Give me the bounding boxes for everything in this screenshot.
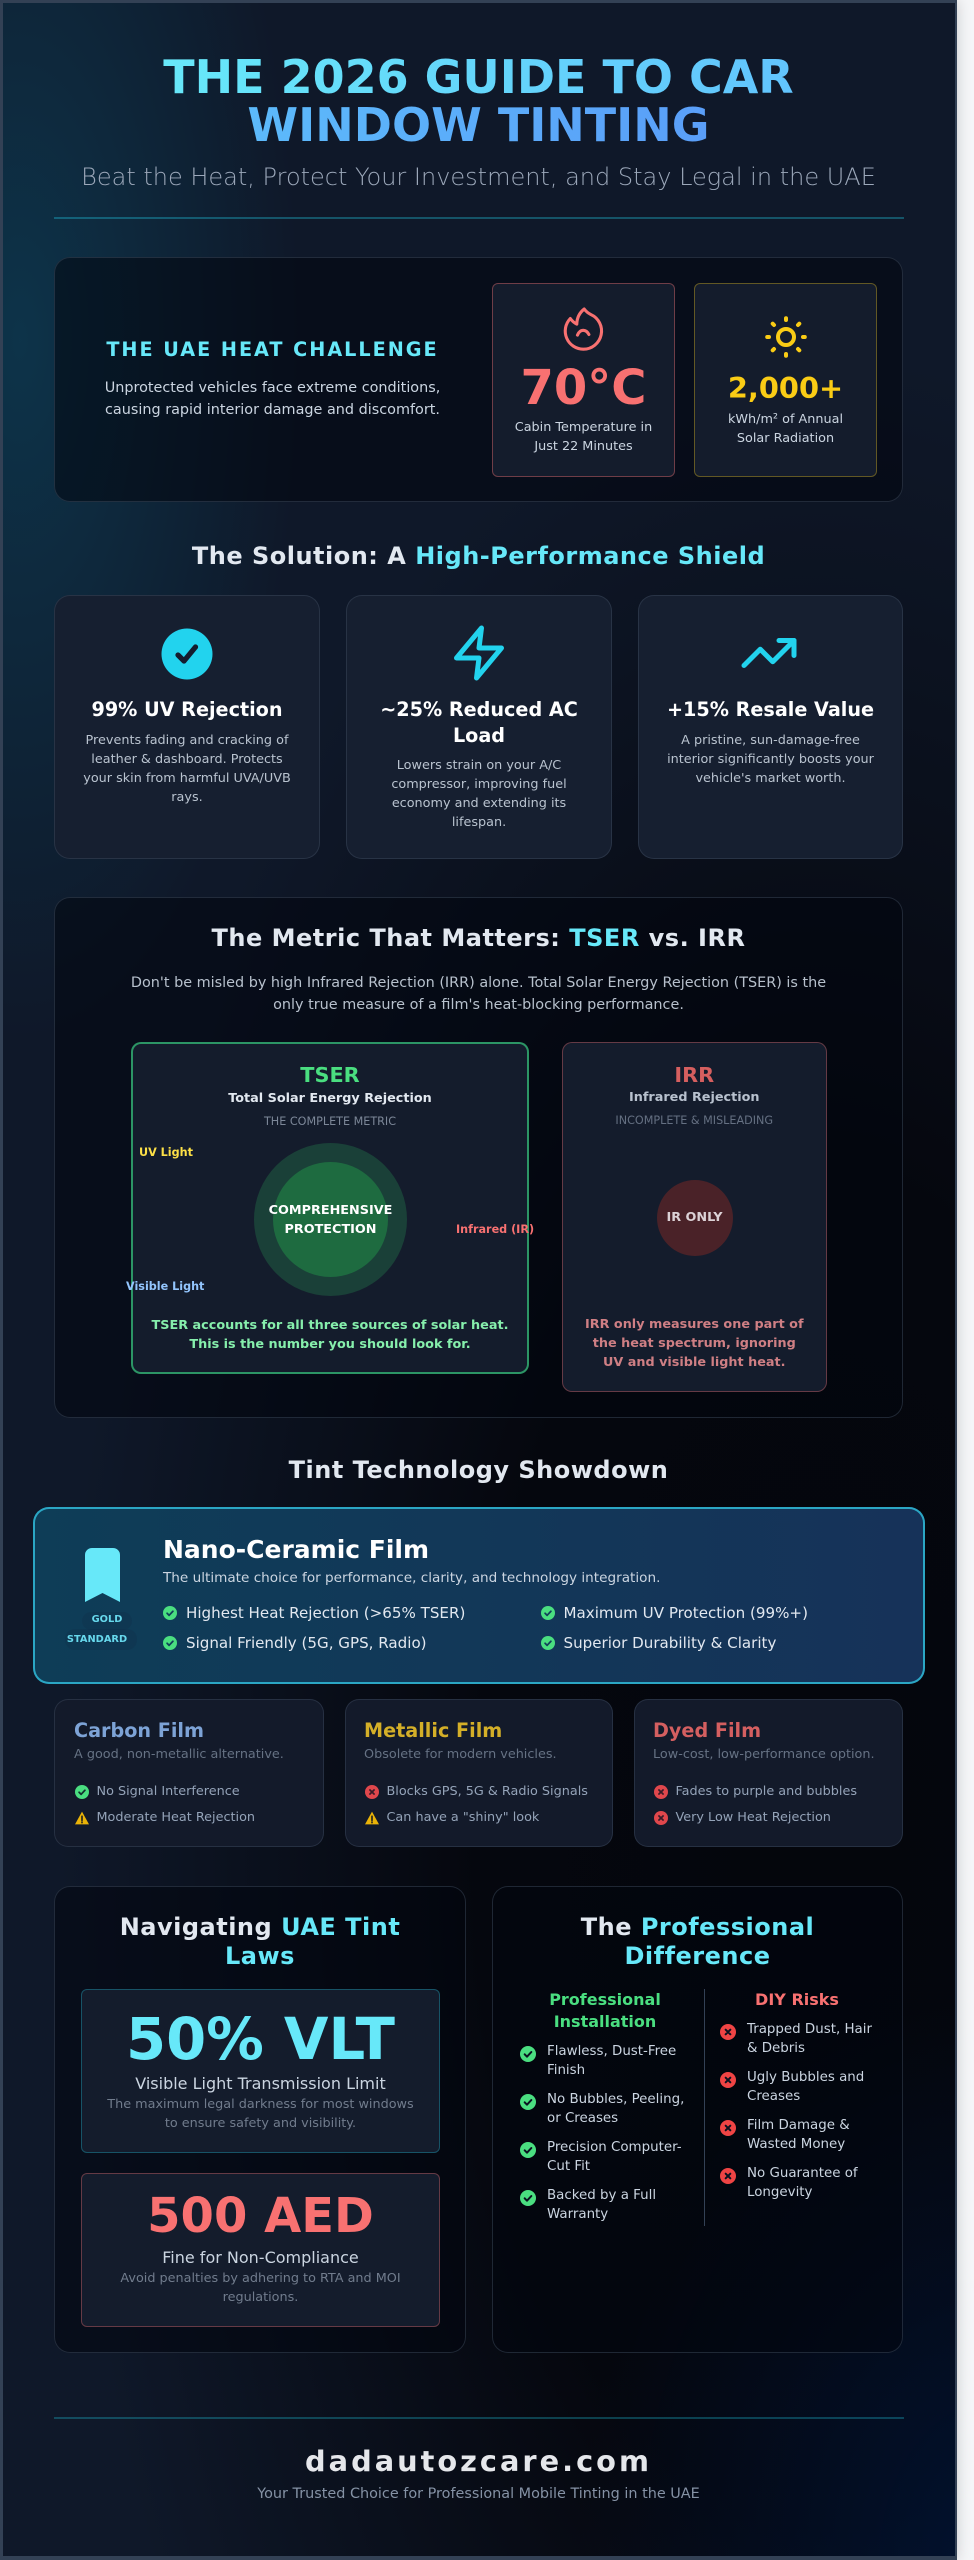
item: shiny look: Can have a "shiny" look — [386, 1810, 539, 1825]
item: no bubbles: or Creases — [547, 2111, 618, 2126]
card note — [152, 1318, 508, 1352]
card subtitle: Total Solar Energy Rejection — [228, 1091, 432, 1106]
card subtitle: A good, non-metallic alternative. — [74, 1747, 284, 1762]
feature: highest heat rejection: Highest Heat Rejection (>65% TSER) — [186, 1604, 465, 1622]
label: infrared: Infrared (IR) — [456, 1223, 534, 1236]
circle label — [269, 1202, 392, 1236]
label: visible light: Visible Light — [126, 1280, 204, 1293]
heading: heat challenge: THE UAE HEAT CHALLENGE — [106, 338, 439, 361]
item: no bubbles: No Bubbles, Peeling, — [547, 2092, 684, 2107]
panel: UAE tint laws — [54, 1886, 466, 2353]
stat value: 50% VLT: 50% VLT — [126, 2006, 395, 2073]
item: trapped dust: & Debris — [747, 2041, 805, 2056]
stat description — [120, 2270, 401, 2304]
card title: Load — [453, 724, 505, 747]
card subtitle: The ultimate choice for performance, clarity, and technology integration. — [163, 1570, 660, 1586]
column: professional installation — [520, 1990, 684, 2222]
text: metric intro: only true measure of a film's heat-blocking performance. — [273, 997, 684, 1013]
stat description: The maximum legal darkness for most windows — [107, 2096, 414, 2112]
heading: the solution: The Solution: A High-Performance Shield — [192, 542, 765, 570]
title — [163, 50, 794, 152]
card subtitle: Obsolete for modern vehicles. — [364, 1747, 557, 1762]
feature: signal friendly: Signal Friendly (5G, GPS, Radio) — [186, 1634, 427, 1652]
card title: Dyed Film — [653, 1719, 761, 1742]
item: ugly bubbles — [716, 2068, 891, 2108]
outer protection ring — [254, 1143, 407, 1296]
heading: tint technology showdown: Tint Technology Showdown — [289, 1456, 668, 1484]
item: no signal interference: No Signal Interference — [96, 1784, 240, 1799]
item: flawless finish: Flawless, Dust-Free — [547, 2044, 676, 2059]
heading: navigating UAE tint laws: Laws — [225, 1942, 295, 1970]
card text — [83, 732, 291, 805]
item: precision cut: Cut Fit — [547, 2159, 590, 2174]
card text: compressor, improving fuel — [391, 777, 567, 792]
heading: navigating UAE tint laws — [120, 1912, 400, 1970]
card subtitle: Infrared Rejection — [629, 1090, 760, 1105]
card: visible light limit — [81, 1989, 440, 2153]
icon: flame — [564, 307, 604, 351]
card: resale value — [638, 595, 903, 859]
heading: the metric that matters: The Metric That Matters: TSER vs. IRR — [212, 924, 745, 952]
stat label: cabin temperature — [515, 420, 652, 454]
card title: Metallic Film — [364, 1719, 502, 1742]
card text: Prevents fading and cracking of — [86, 732, 288, 748]
item: warranty — [516, 2186, 701, 2226]
card title: 99% UV Rejection — [91, 698, 283, 721]
feature: superior durability: Superior Durability & Clarity — [564, 1634, 776, 1652]
diagram: solar heat sources — [126, 1143, 534, 1296]
panel: the professional difference — [492, 1886, 903, 2353]
icon: lightning bolt — [454, 626, 504, 680]
item: film damage: Wasted Money — [747, 2137, 845, 2152]
text: heat challenge description: causing rapid interior damage and discomfort. — [105, 402, 440, 418]
item: blocks signals: Blocks GPS, 5G & Radio Signals — [386, 1784, 588, 1799]
stat label: cabin temperature: Cabin Temperature in — [515, 420, 652, 434]
column heading: Installation — [554, 2012, 656, 2031]
item: flawless finish — [520, 2044, 676, 2078]
card text: A pristine, sun-damage-free — [681, 732, 860, 748]
card note: the heat spectrum, ignoring — [593, 1336, 796, 1350]
card: metallic film — [345, 1699, 613, 1847]
title: THE 2026 GUIDE TO CAR — [163, 50, 794, 104]
card note: IRR only measures one part of — [585, 1316, 804, 1332]
text: metric intro: Don't be misled by high Infrared Rejection (IRR) alone. Total Solar Energy Rejection (TSER) is the — [131, 975, 826, 991]
stat value: 70°C: 70°C — [520, 360, 647, 416]
text: heat challenge description — [105, 380, 440, 418]
card note: UV and visible light heat. — [603, 1354, 786, 1370]
column heading: Professional — [549, 1990, 661, 2009]
card tag: INCOMPLETE & MISLEADING — [615, 1114, 773, 1127]
card text: Lowers strain on your A/C — [397, 758, 561, 772]
card text: lifespan. — [452, 815, 506, 830]
card title: ~25% Reduced AC — [380, 698, 578, 721]
heading: the professional difference: The Professional — [581, 1912, 814, 1940]
card text: rays. — [171, 790, 203, 805]
icon: sun — [765, 316, 807, 358]
card title: Carbon Film — [74, 1719, 204, 1742]
label: UV light: UV Light — [139, 1146, 193, 1159]
item: no guarantee: No Guarantee of — [747, 2166, 858, 2181]
heading: navigating UAE tint laws: Navigating UAE Tint — [120, 1912, 400, 1940]
heading: the professional difference — [580, 1912, 814, 1970]
stat label: cabin temperature: Just 22 Minutes — [534, 438, 633, 454]
item: trapped dust — [716, 2020, 891, 2060]
item: flawless finish: Finish — [547, 2063, 585, 2078]
card text: interior significantly boosts your — [667, 752, 874, 767]
badge text: standard: STANDARD — [67, 1634, 127, 1645]
icon: check circle — [162, 628, 212, 680]
icon: bookmark — [85, 1548, 120, 1602]
card: IRR — [562, 1042, 827, 1392]
item: film damage — [716, 2116, 891, 2156]
inner protection circle — [273, 1162, 388, 1277]
stat description — [107, 2096, 414, 2130]
item: fades to purple: Fades to purple and bubbles — [676, 1784, 857, 1799]
circle label: COMPREHENSIVE — [269, 1202, 392, 1218]
item: moderate heat rejection: Moderate Heat Rejection — [96, 1810, 255, 1825]
column: DIY risks — [716, 1989, 891, 2226]
footer: website: dadautozcare.com — [305, 2444, 652, 2478]
subtitle: Beat the Heat, Protect Your Investment, and Stay Legal in the UAE — [81, 163, 876, 191]
item: precision cut: Precision Computer- — [547, 2140, 682, 2155]
card text: vehicle's market worth. — [695, 771, 846, 786]
card: reduced AC load — [346, 595, 612, 859]
card note: This is the number you should look for. — [189, 1336, 471, 1352]
footer: tagline: Your Trusted Choice for Professional Mobile Tinting in the UAE — [257, 2486, 700, 2502]
card text — [391, 758, 567, 830]
stat label: solar radiation: kWh/m² of Annual — [728, 412, 843, 426]
panel: TSER vs IRR — [54, 897, 903, 1418]
stat description: Avoid penalties by adhering to RTA and MOI — [120, 2270, 401, 2286]
card text: your skin from harmful UVA/UVB — [83, 771, 291, 786]
card text: economy and extending its — [392, 796, 566, 811]
stat card: cabin temperature — [492, 283, 675, 477]
item: trapped dust: Trapped Dust, Hair — [747, 2022, 872, 2037]
card title: Nano-Ceramic Film — [163, 1535, 429, 1564]
item: warranty: Backed by a Full — [547, 2188, 656, 2203]
stat value: 2,000+: 2,000+ — [728, 371, 843, 405]
feature: maximum UV protection: Maximum UV Protection (99%+) — [564, 1604, 808, 1622]
stat description: regulations. — [223, 2290, 298, 2304]
card text: leather & dashboard. Protects — [91, 752, 283, 767]
stat card: solar radiation — [694, 283, 877, 477]
stat label: Visible Light Transmission Limit — [135, 2074, 386, 2093]
text: heat challenge description: Unprotected vehicles face extreme conditions, — [105, 380, 440, 396]
card note: TSER accounts for all three sources of solar heat. — [152, 1318, 508, 1332]
item: no guarantee: Longevity — [747, 2185, 812, 2200]
card text — [667, 732, 874, 786]
diagram: IR only circle: IR ONLY — [666, 1210, 723, 1225]
badge text: gold: GOLD — [92, 1614, 122, 1625]
card: UV rejection — [54, 595, 320, 859]
stat value: 500 AED: 500 AED — [147, 2188, 374, 2244]
item: precision cut — [516, 2138, 701, 2178]
item: warranty: Warranty — [547, 2207, 608, 2222]
column heading — [549, 1990, 661, 2031]
item: no bubbles — [520, 2092, 684, 2126]
card: dyed film — [634, 1699, 903, 1847]
text: metric intro — [131, 975, 826, 1013]
card subtitle: Low-cost, low-performance option. — [653, 1747, 875, 1762]
card note — [585, 1316, 804, 1370]
item: very low heat rejection: Very Low Heat Rejection — [676, 1810, 831, 1825]
circle label: PROTECTION — [284, 1222, 377, 1236]
card title — [380, 698, 578, 747]
heading: the professional difference: Difference — [624, 1942, 770, 1970]
item: ugly bubbles: Creases — [747, 2089, 800, 2104]
card tag: THE COMPLETE METRIC — [264, 1115, 396, 1128]
card title: TSER: TSER — [300, 1063, 360, 1087]
badge: gold standard — [67, 1614, 127, 1645]
item: film damage: Film Damage & — [747, 2118, 850, 2133]
item: no guarantee — [716, 2164, 891, 2204]
stat label: Fine for Non-Compliance — [162, 2248, 359, 2267]
diagram: IR only circle — [656, 1180, 732, 1256]
panel: UAE heat challenge — [54, 257, 903, 502]
item: ugly bubbles: Ugly Bubbles and — [747, 2070, 864, 2085]
column heading: DIY Risks — [755, 1990, 839, 2009]
icon: trending up arrow — [742, 638, 796, 668]
card: fine — [81, 2173, 440, 2327]
card: nano-ceramic film — [33, 1507, 925, 1684]
card: carbon film — [54, 1699, 324, 1847]
stat label: solar radiation: Solar Radiation — [737, 430, 834, 446]
stat label: solar radiation — [728, 412, 843, 446]
stat description: to ensure safety and visibility. — [165, 2116, 356, 2130]
title: WINDOW TINTING — [247, 98, 710, 152]
card title: +15% Resale Value — [667, 698, 874, 721]
card title: IRR: IRR — [674, 1062, 714, 1086]
card: TSER — [131, 1042, 529, 1374]
